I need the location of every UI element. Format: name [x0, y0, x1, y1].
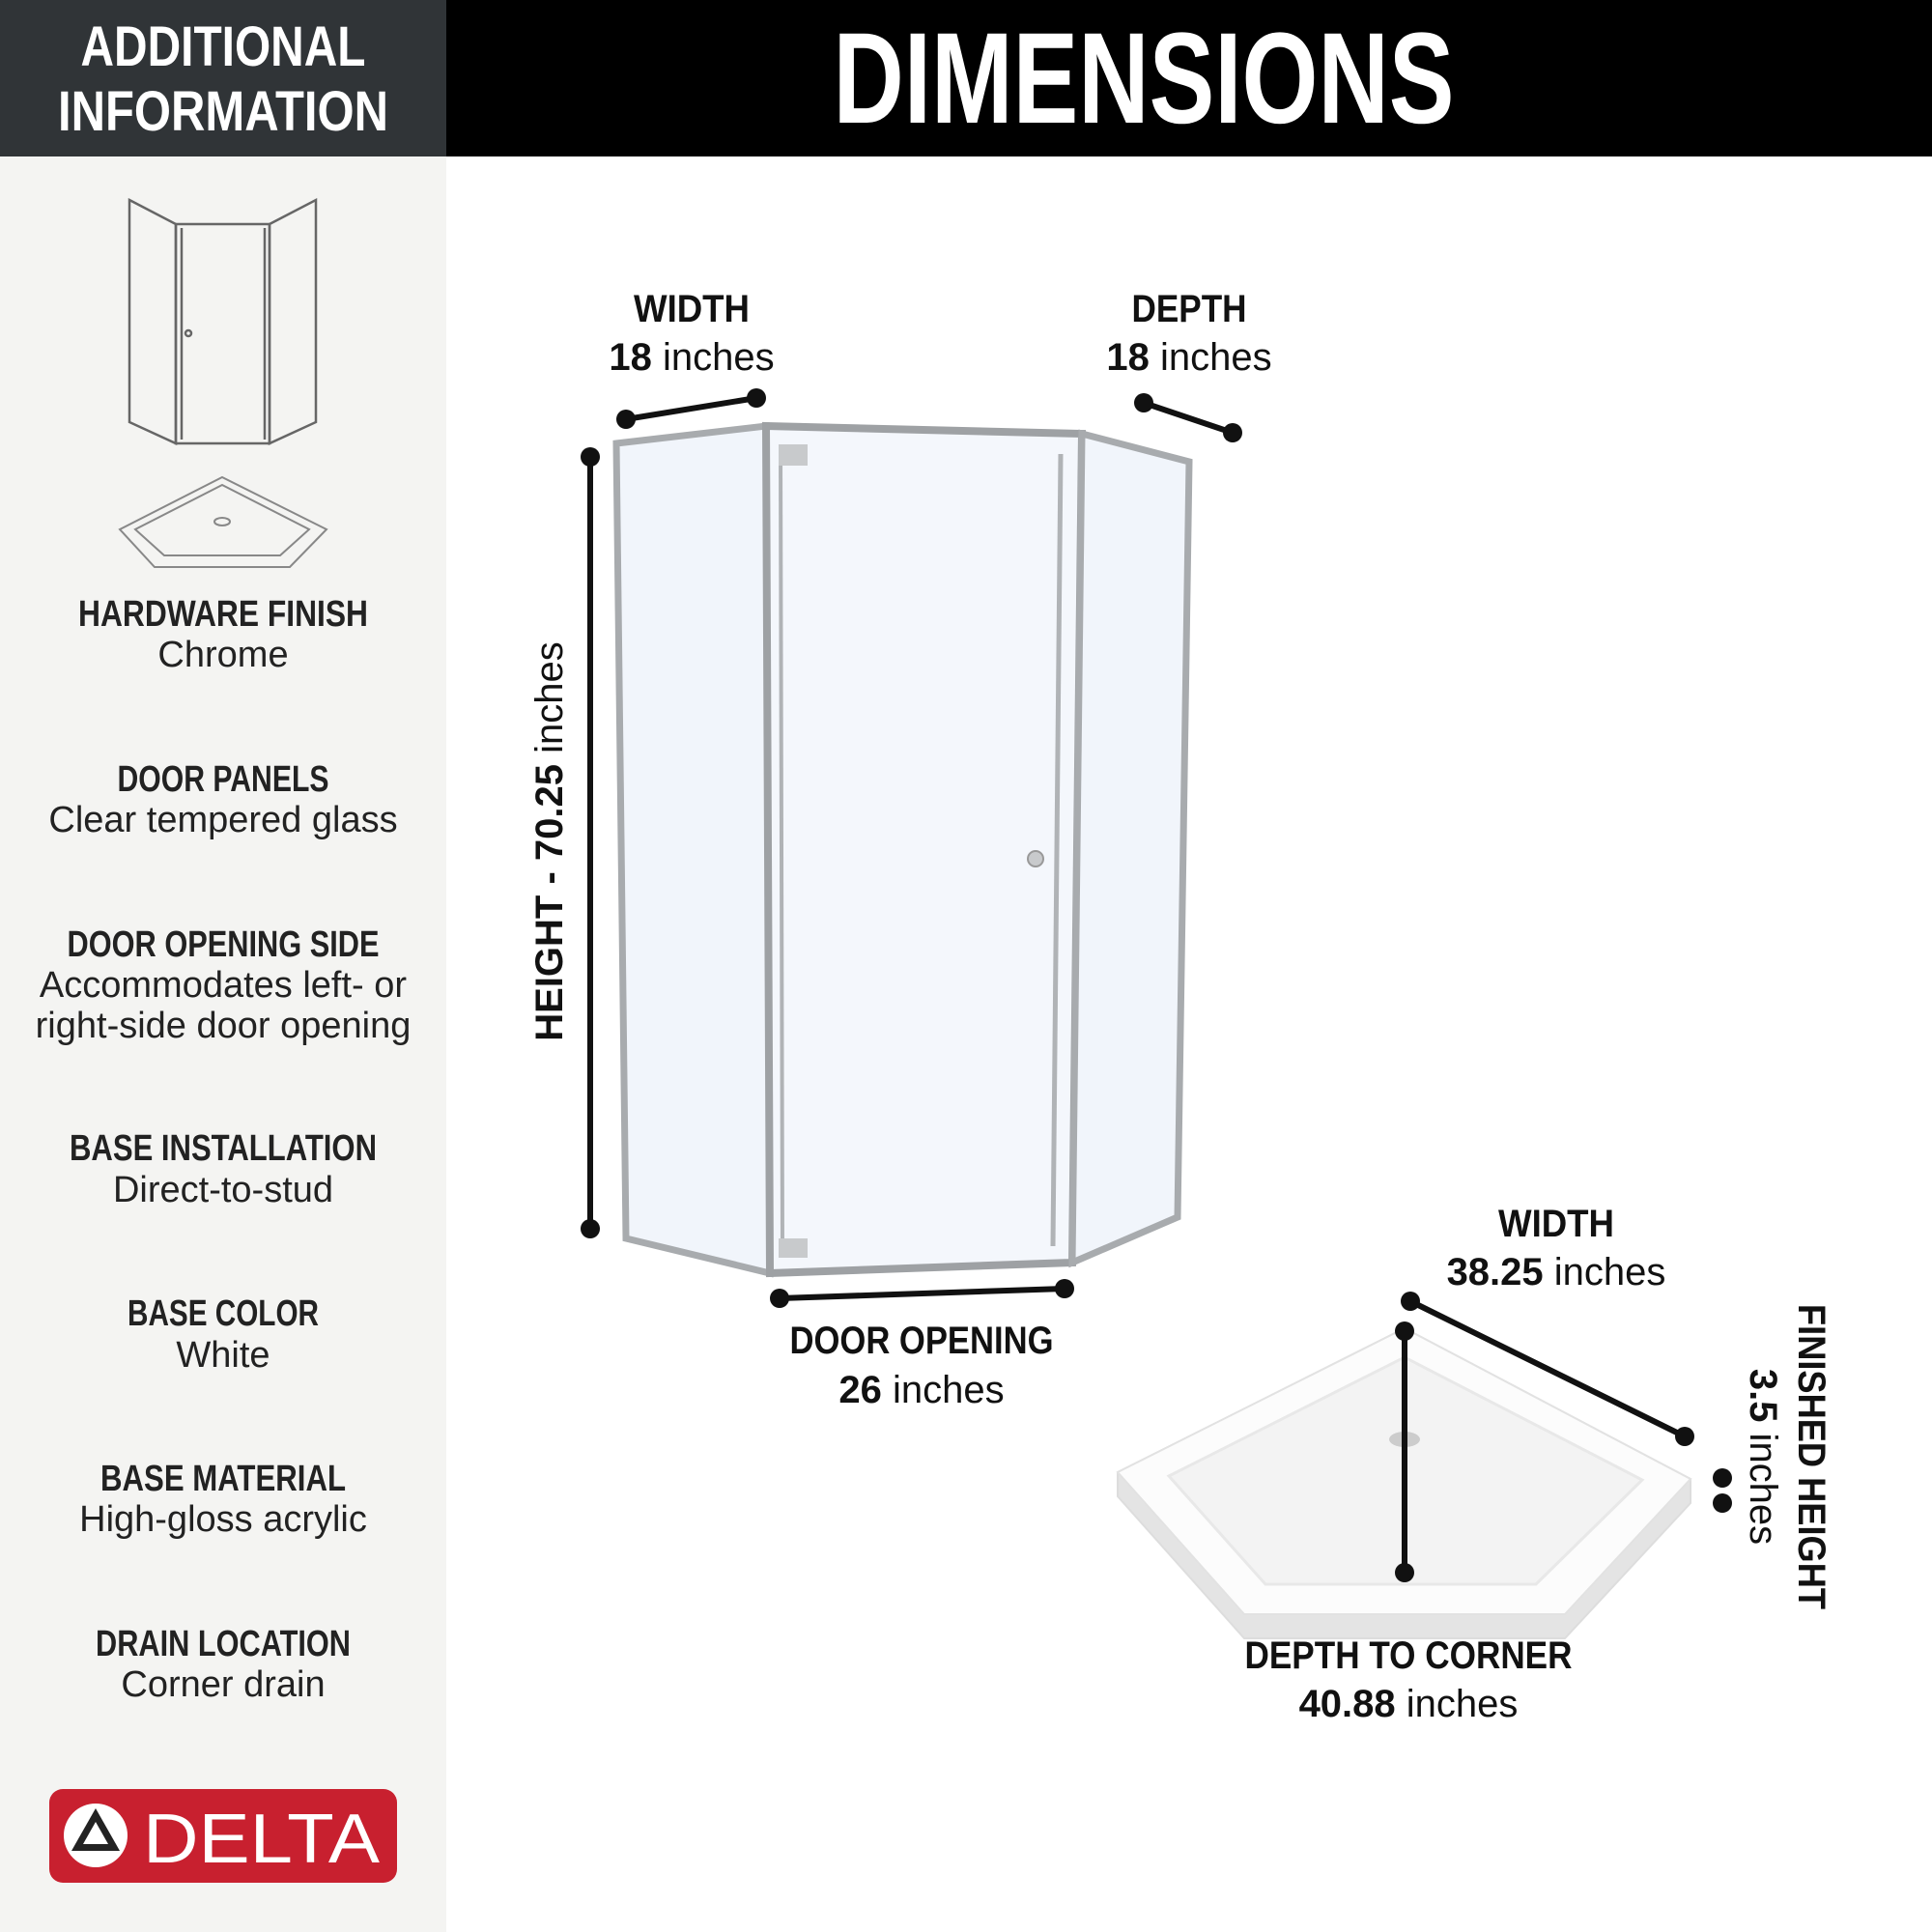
text: base material: High-gloss acrylic: [79, 1499, 367, 1540]
text: door panels: Clear tempered glass: [48, 800, 398, 840]
text: door opening side: right-side door opening: [36, 1006, 411, 1046]
text: hardware finish: HARDWARE FINISH: [78, 594, 368, 635]
icon: shower base: [120, 477, 327, 567]
text: door opening side: [36, 924, 411, 1046]
text: hardware finish: Chrome: [157, 635, 289, 675]
dimension: door opening: DOOR OPENING: [790, 1320, 1053, 1362]
dimension: depth to corner: 40.88 inches: [1299, 1683, 1518, 1725]
header: dimensions: DIMENSIONS: [833, 7, 1455, 151]
dimension: depth 18: 18 inches: [1106, 336, 1272, 379]
text: drain location: DRAIN LOCATION: [96, 1624, 351, 1664]
dimension: depth 18: DEPTH: [1132, 288, 1246, 330]
shower base drawing: [1118, 1328, 1690, 1638]
dimension: base width: [1401, 1203, 1694, 1446]
dimension: depth to corner: DEPTH TO CORNER: [1244, 1634, 1573, 1677]
dimension: finished height: FINISHED HEIGHT: [1790, 1304, 1833, 1609]
icon: shower enclosure: [129, 200, 316, 443]
text: door panels: DOOR PANELS: [118, 759, 328, 800]
text: door opening side: Accommodates left- or: [40, 965, 407, 1006]
text: hardware finish: [78, 594, 368, 675]
dimension: finished height: [1713, 1304, 1833, 1609]
left panel background: [0, 0, 446, 1932]
dimension: base width: 38.25 inches: [1447, 1251, 1665, 1293]
dimension: width 18: 18 inches: [609, 336, 775, 379]
text: drain location: Corner drain: [121, 1664, 326, 1705]
text: base color: BASE COLOR: [128, 1293, 319, 1334]
dimension: width 18: [609, 288, 775, 429]
logo: delta: [49, 1789, 397, 1883]
text: base installation: BASE INSTALLATION: [70, 1128, 377, 1169]
dimension: height: [528, 447, 600, 1238]
text: base installation: [70, 1128, 377, 1210]
shower enclosure drawing: [616, 426, 1189, 1273]
text: door opening side: DOOR OPENING SIDE: [68, 924, 379, 965]
text: base color: [128, 1293, 319, 1376]
logo: delta: DELTA: [143, 1801, 380, 1878]
dimension: width 18: WIDTH: [634, 288, 750, 330]
dimension: height: HEIGHT - 70.25 inches: [528, 641, 571, 1041]
text: base material: BASE MATERIAL: [100, 1459, 346, 1499]
dimension: depth 18: [1106, 288, 1272, 442]
dimension: depth to corner: [1244, 1321, 1573, 1725]
text: base color: White: [176, 1335, 270, 1376]
header: additional information: INFORMATION: [58, 80, 388, 143]
header: additional information: ADDITIONAL: [81, 15, 365, 78]
text: base installation: Direct-to-stud: [113, 1170, 333, 1210]
text: drain location: [96, 1624, 351, 1705]
text: door panels: [48, 759, 398, 840]
dimension: finished height: 3.5 inches: [1742, 1369, 1784, 1545]
dimension: door opening: [770, 1279, 1074, 1411]
dimension: door opening: 26 inches: [838, 1369, 1005, 1411]
header: dimensions: [446, 0, 1932, 156]
text: base material: [79, 1459, 367, 1540]
header: additional information: [0, 0, 446, 156]
dimension: base width: WIDTH: [1498, 1203, 1614, 1245]
